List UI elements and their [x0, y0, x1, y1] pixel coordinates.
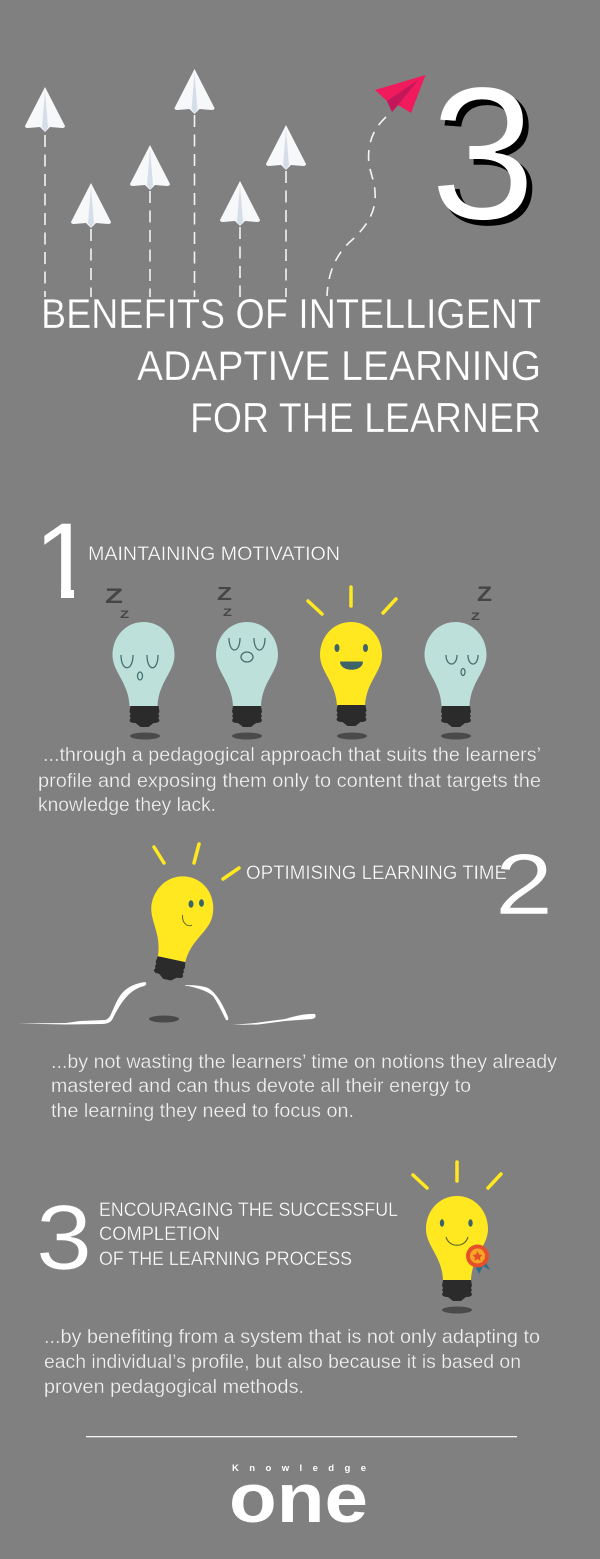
section 2 paragraph	[51, 1052, 558, 1122]
logo: Knowledge one: Knowledge	[232, 1463, 366, 1474]
bulb: sleeping 2: Z	[217, 584, 232, 604]
section 2 heading: OPTIMISING LEARNING TIME	[246, 862, 507, 884]
section 2 paragraph: mastered and can thus devote all their energy to	[51, 1076, 471, 1097]
section 3 paragraph: proven pedagogical methods.	[44, 1377, 304, 1398]
section 2 illustration: bulb jumping out of the ground	[18, 844, 316, 1025]
big number 3 with black shadow: 3	[435, 53, 541, 265]
section 3 number: 3	[36, 1187, 92, 1289]
section 3 paragraph: each individual’s profile, but also because it is based on	[44, 1352, 521, 1373]
section 1 paragraph: ...through a pedagogical approach that suits the learners’	[43, 745, 541, 766]
logo: Knowledge one: one	[229, 1459, 368, 1537]
illustration: white paper planes with dashed trails	[25, 69, 306, 297]
section 3 heading	[99, 1199, 398, 1270]
bulb: awake yellow	[308, 587, 396, 740]
rays	[154, 844, 239, 879]
section 2 number: 2	[495, 837, 553, 933]
section 1 paragraph	[38, 745, 541, 816]
section 2 paragraph: ...by not wasting the learners’ time on notions they already	[51, 1052, 558, 1073]
section 3 heading: COMPLETION	[99, 1223, 220, 1245]
section 3 illustration: bulb with medal	[413, 1162, 501, 1314]
title: FOR THE LEARNER	[190, 394, 541, 441]
section 1 illustration: row of light bulbs	[105, 583, 492, 740]
bulb: sleeping 2: Z	[223, 607, 232, 619]
section 3 paragraph: ...by benefiting from a system that is not only adapting to	[44, 1327, 540, 1348]
icon: medal	[466, 1244, 490, 1274]
bulb: sleeping 1: Z	[120, 609, 129, 621]
section 1 heading: MAINTAINING MOTIVATION	[88, 543, 340, 565]
footer divider	[86, 1436, 517, 1437]
bulb: sleeping 3: Z	[471, 611, 480, 623]
section 3 heading: ENCOURAGING THE SUCCESSFUL	[99, 1199, 398, 1221]
illustration: red paper plane with curved dashed trail	[327, 75, 426, 296]
bulb: sleeping 3	[424, 583, 492, 740]
bulb: sleeping 1	[105, 585, 174, 740]
bulb: sleeping 3: Z	[477, 583, 492, 606]
title: BENEFITS OF INTELLIGENT	[41, 290, 541, 337]
title	[41, 290, 541, 441]
bulb: sleeping 2	[216, 584, 278, 740]
section 1 number: 1	[34, 500, 94, 621]
section 3 heading: OF THE LEARNING PROCESS	[99, 1248, 352, 1270]
big number 3 with black shadow	[438, 87, 532, 226]
ground crack strokes	[18, 982, 316, 1025]
section 1 paragraph: profile and exposing them only to content that targets the	[38, 771, 541, 792]
big number 3 with black shadow: 3	[430, 48, 536, 260]
section 2 paragraph: the learning they need to focus on.	[51, 1101, 354, 1122]
section 1 paragraph: knowledge they lack.	[38, 795, 216, 816]
title: ADAPTIVE LEARNING	[137, 342, 541, 389]
tilted bulb	[137, 871, 219, 986]
section 3 paragraph	[44, 1327, 540, 1398]
bulb: sleeping 1: Z	[105, 585, 123, 608]
